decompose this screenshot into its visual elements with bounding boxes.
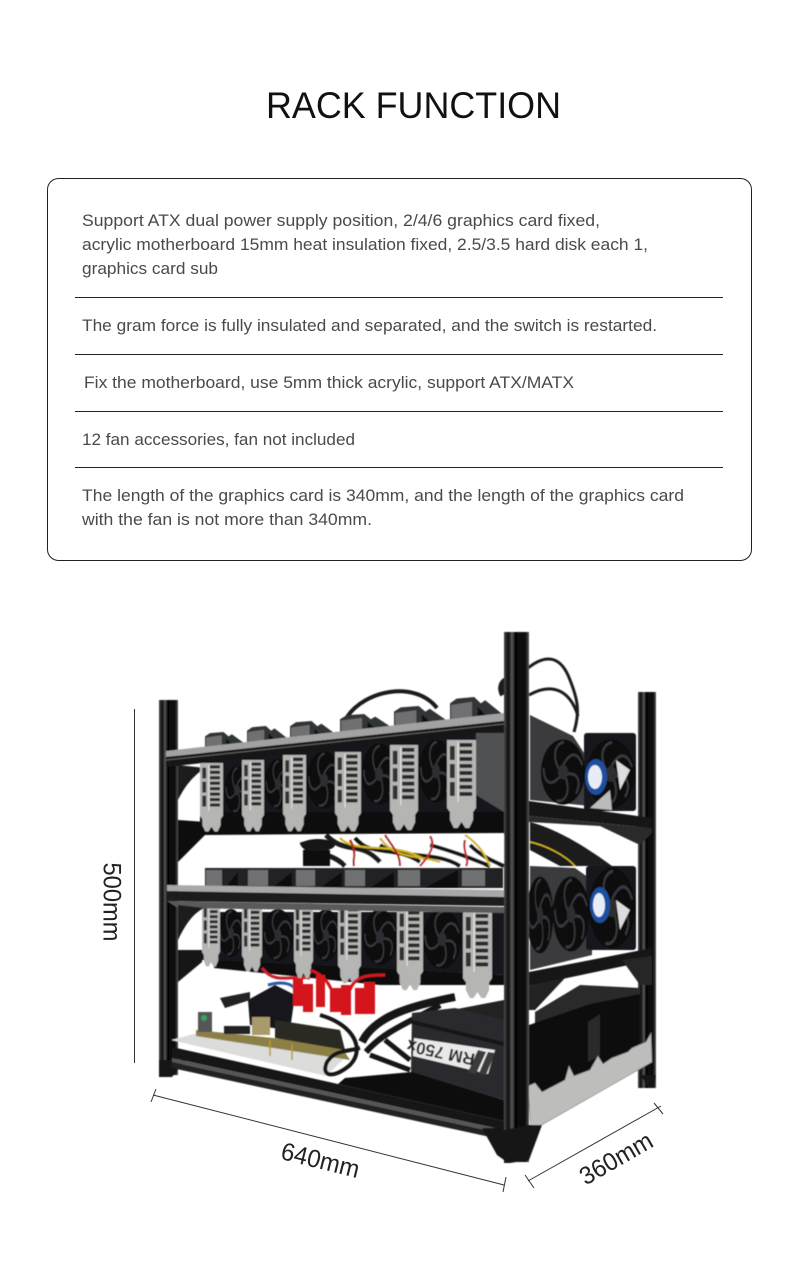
silver bracket [528,1033,652,1131]
dimension: 360mm depth: 360mm [575,1127,658,1191]
power supply rear [529,985,640,1105]
label: RM 750x: RM 750x [405,1036,477,1069]
side fans upper tier [530,715,636,811]
text: motherboard fixing: Fix the motherboard, use 5mm thick acrylic, support ATX/MATX [84,374,574,392]
front bottom rail [172,1047,504,1140]
text: power supply and graphics card support: Support ATX dual power supply position, 2/4/6 graphics card fixed, [82,212,600,230]
text: power supply and graphics card support: graphics card sub [82,260,218,278]
text: graphics card length: The length of the graphics card is 340mm, and the length of the graphics card [82,487,684,505]
left post [159,700,178,1075]
front foot [482,1125,542,1163]
black cable bundle [320,997,455,1074]
wiring between tiers [301,835,504,866]
motherboard [196,992,350,1060]
upper tier graphics cards [200,697,505,831]
upper shelf underside [178,765,504,862]
cpu cooler [248,985,295,1030]
upper front rail [166,713,504,767]
middle tier graphics cards [202,903,504,998]
dimension: 640mm width: 640mm [278,1137,363,1184]
dimension: 360mm depth [525,1103,663,1191]
text: insulation and switch: The gram force is fully insulated and separated, and the switch is restarted. [82,317,657,335]
side shelf rails [529,801,652,1010]
text: power supply and graphics card support: acrylic motherboard 15mm heat insulation fixed, 2.5/3.5 hard disk each 1, [82,236,648,254]
back right post [638,692,656,1088]
front power supply [405,1000,504,1100]
text: fan accessories: 12 fan accessories, fan not included [82,431,355,449]
dimension: 500mm height: 500mm [97,862,125,942]
rear foot [641,1075,656,1088]
middle tier graphics card tops [205,868,503,888]
acrylic plate [171,1031,345,1076]
panel: rack function specifications [48,178,752,560]
rear cables [347,659,578,732]
dimension: 640mm width [151,1089,506,1192]
side fans middle tier [527,866,636,970]
title: RACK FUNCTION [266,85,561,126]
front right post [504,632,529,1162]
middle front rail [167,885,504,982]
text: graphics card length: with the fan is not more than 340mm. [81,511,372,529]
red power connectors [293,970,385,1015]
left foot [159,1060,186,1077]
illustration: open mining rack with graphics cards [159,632,656,1163]
